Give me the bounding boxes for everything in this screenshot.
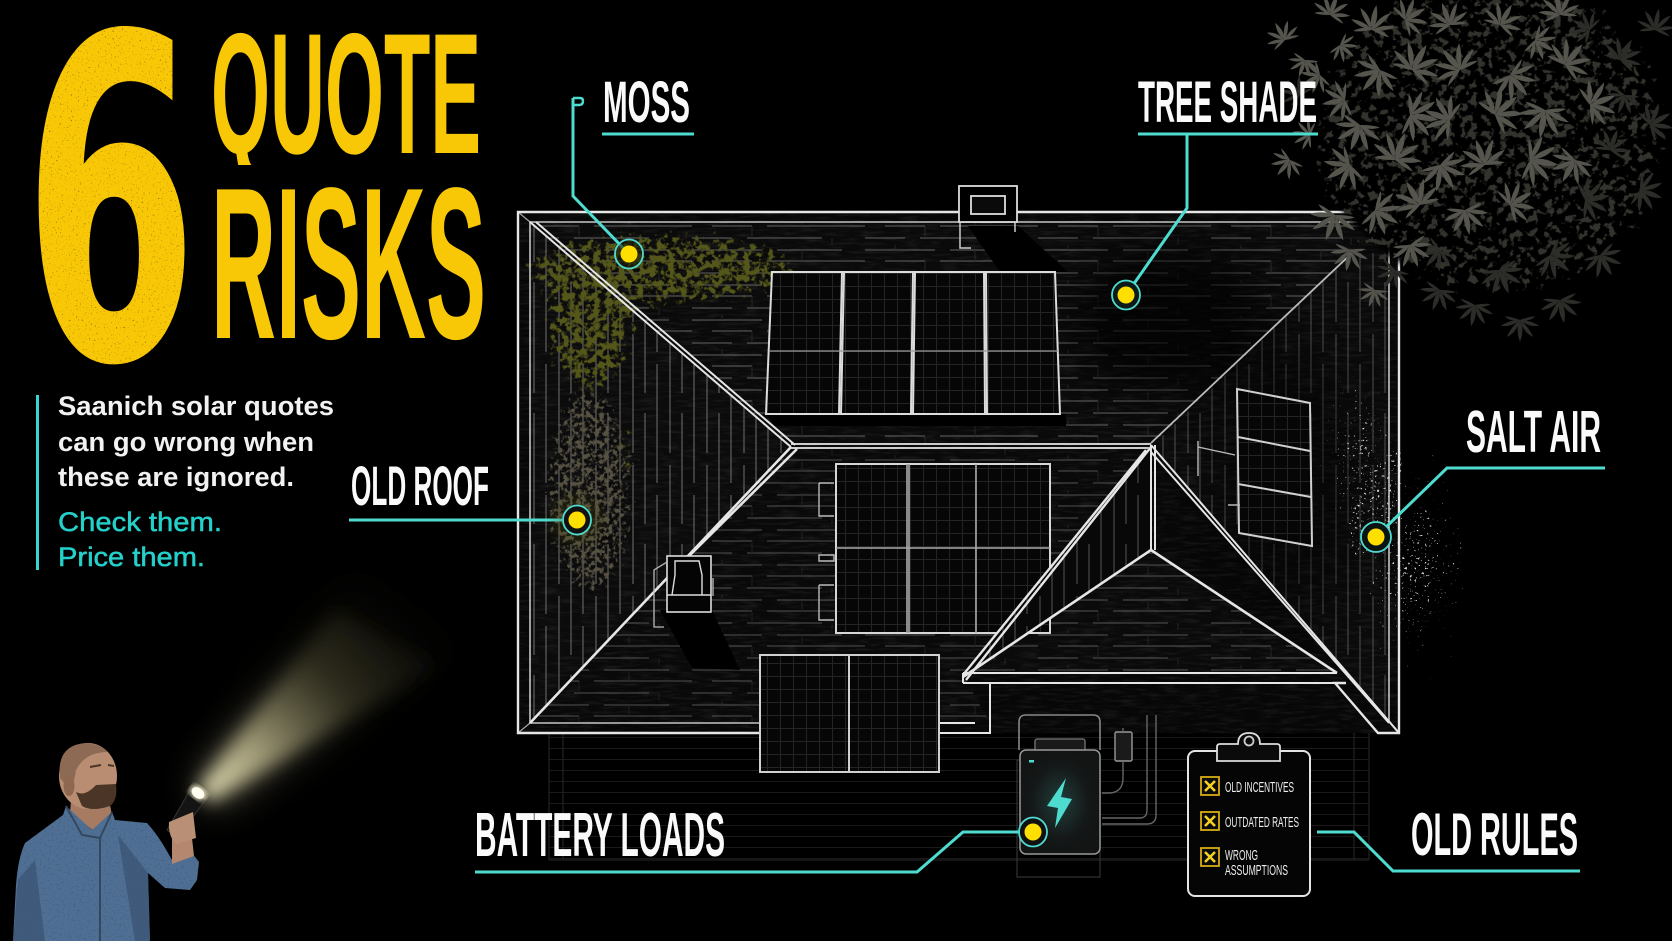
left chimney bbox=[654, 556, 740, 670]
wall plug and cable bbox=[1102, 715, 1156, 824]
front gable bbox=[963, 445, 1346, 683]
white statement: these are ignored. bbox=[58, 462, 294, 492]
flashlight lens bbox=[187, 783, 209, 803]
shingles: top facet bbox=[530, 222, 1389, 445]
accent bar bbox=[36, 395, 39, 570]
solar panels: center array bbox=[836, 464, 1050, 633]
moss patch bbox=[515, 226, 805, 500]
callout: salt air bbox=[1361, 399, 1605, 552]
white statement bbox=[58, 391, 334, 492]
top chimney bbox=[959, 186, 1068, 272]
shirt bbox=[13, 806, 199, 941]
callout: old rules bbox=[1317, 801, 1580, 871]
placket and collar bbox=[66, 806, 112, 941]
head bbox=[59, 743, 117, 809]
panel mounting brackets bbox=[819, 441, 1240, 620]
callout: old roof bbox=[349, 454, 601, 544]
tree shade marker bbox=[1112, 280, 1140, 310]
shingles: gable bbox=[963, 550, 1337, 675]
roof outline bbox=[518, 212, 1399, 733]
hand bbox=[169, 812, 196, 844]
roof surface bbox=[518, 212, 1399, 733]
presenter with flashlight bbox=[13, 743, 209, 941]
callout: moss bbox=[573, 70, 694, 268]
ear bbox=[64, 776, 74, 796]
text: RISKS bbox=[211, 142, 486, 384]
solar panels: right array bbox=[1237, 389, 1312, 546]
roof bbox=[515, 212, 1400, 734]
neck bbox=[70, 790, 112, 832]
text: TREE SHADE bbox=[1138, 70, 1317, 135]
cyan statement: Check them. bbox=[58, 507, 222, 537]
callout: battery loads: BATTERY LOADS bbox=[475, 801, 725, 870]
forearm bbox=[172, 838, 194, 864]
moss label: MOSS bbox=[603, 70, 690, 135]
tree shade underline bbox=[1138, 132, 1318, 136]
checklist item: wrong assumptions: ASSUMPTIONS bbox=[1225, 863, 1288, 879]
house below the roof bbox=[549, 733, 1369, 861]
shingles: right facet bbox=[1151, 253, 1389, 723]
bright leaf sprays bbox=[1260, 0, 1624, 312]
shingles: left facet bbox=[530, 222, 791, 723]
flashlight beam bbox=[198, 575, 480, 805]
checklist item: outdated rates: OUTDATED RATES bbox=[1225, 815, 1299, 831]
moss underline bbox=[602, 132, 694, 136]
checklist item: outdated rates bbox=[1201, 812, 1299, 831]
clipboard bbox=[1188, 733, 1310, 896]
icon: lightning bolt bbox=[1047, 778, 1072, 828]
salt air marker bbox=[1361, 522, 1391, 552]
clip ring bbox=[1244, 736, 1254, 746]
battery loads marker bbox=[1019, 818, 1047, 846]
flashlight body bbox=[167, 790, 205, 838]
battery base outline bbox=[1017, 760, 1100, 877]
white statement: can go wrong when bbox=[58, 427, 314, 457]
checklist item: wrong assumptions: WRONG bbox=[1225, 848, 1258, 864]
board bbox=[1188, 751, 1310, 896]
white statement: Saanich solar quotes bbox=[58, 391, 334, 421]
dim leaf sprays bbox=[1274, 5, 1672, 342]
battery bbox=[1017, 715, 1156, 877]
canopy shadow bbox=[1305, 0, 1672, 290]
callout: tree shade bbox=[1112, 70, 1318, 310]
roof grain bbox=[518, 212, 1400, 734]
cyan statement bbox=[58, 507, 222, 572]
checklist item: wrong assumptions bbox=[1201, 848, 1288, 879]
cyan statement: Price them. bbox=[58, 542, 205, 572]
right side shade bbox=[1220, 350, 1360, 610]
checklist item: old incentives bbox=[1201, 777, 1294, 796]
gable outline bbox=[963, 445, 1346, 683]
battery housing bbox=[1019, 715, 1100, 750]
intro text block bbox=[36, 391, 334, 572]
shingles: lower facet bbox=[530, 447, 1151, 723]
battery body bbox=[1020, 750, 1100, 854]
eyes and brow bbox=[90, 765, 114, 767]
beard bbox=[76, 784, 116, 809]
tree shade patch bbox=[1075, 250, 1265, 390]
solar panels: bottom array bbox=[760, 655, 939, 772]
moss marker bbox=[615, 240, 643, 268]
gable facet over panels bbox=[963, 445, 1151, 675]
clip bbox=[1217, 733, 1280, 761]
tree canopy bbox=[1260, 0, 1672, 342]
salt spray bbox=[1318, 355, 1485, 685]
old roof stain bbox=[538, 375, 642, 605]
scalp shade bbox=[60, 743, 108, 792]
moss leader bbox=[573, 98, 629, 254]
status led bbox=[1029, 760, 1034, 762]
shirt shading bbox=[13, 835, 150, 941]
text: QUOTE bbox=[211, 0, 481, 190]
old roof marker bbox=[553, 496, 601, 544]
leader end loop bbox=[573, 98, 583, 105]
rear unit bbox=[1035, 739, 1085, 751]
canopy dim foliage bbox=[1265, 0, 1672, 340]
title: QUOTE RISKS bbox=[214, 32, 482, 340]
checklist item: old incentives: OLD INCENTIVES bbox=[1225, 780, 1294, 796]
solar panels: top array bbox=[766, 272, 1066, 426]
callout: old roof: OLD ROOF bbox=[351, 454, 489, 517]
